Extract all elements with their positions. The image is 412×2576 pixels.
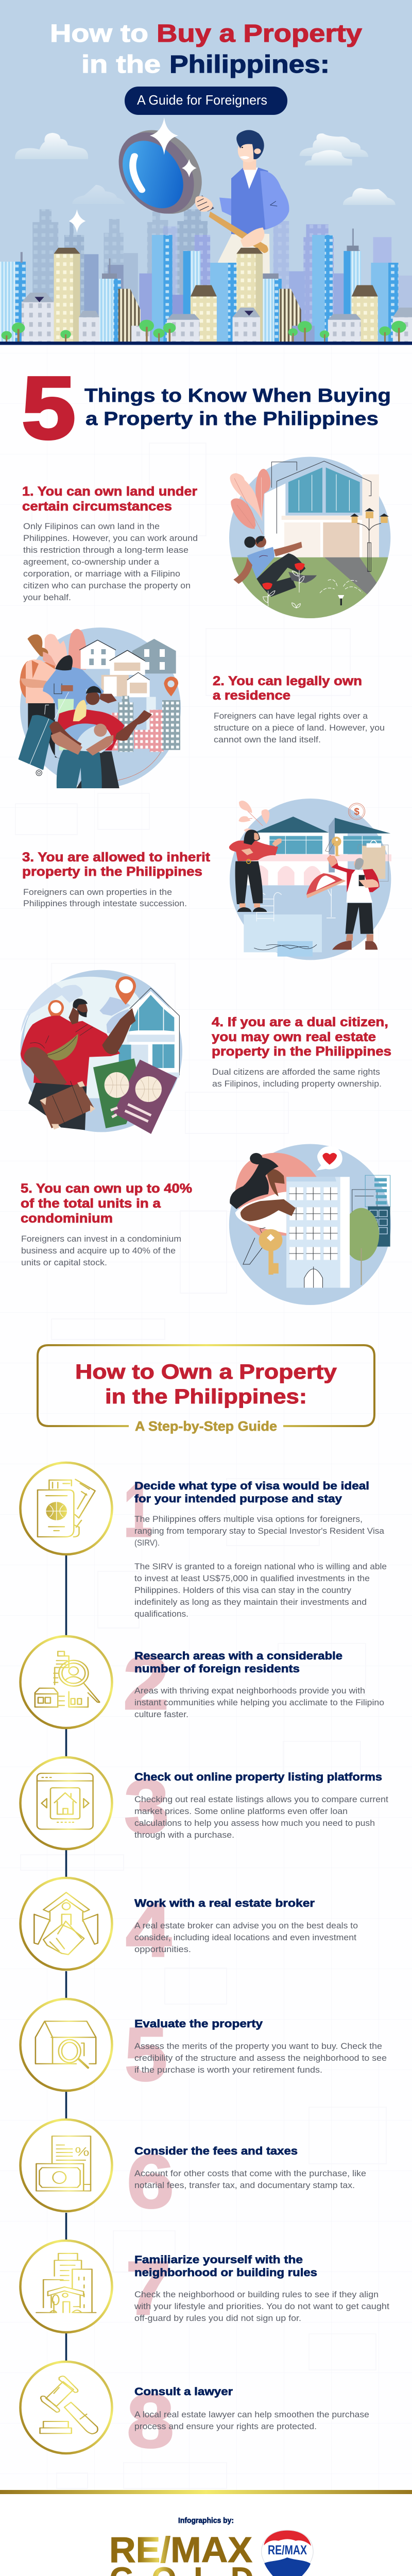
illustration: woman hugging condominium xyxy=(229,1144,391,1305)
text 1: your behalf. xyxy=(23,592,71,602)
step 8 title: Consult a lawyer xyxy=(134,2385,233,2398)
step 4 text: A real estate broker can advise you on the best deals to xyxy=(134,1921,358,1930)
panel: thing 5 xyxy=(21,1144,391,1305)
text 1: Philippines. However, you can work around xyxy=(23,533,198,543)
step 1 title: Decide what type of visa would be ideal xyxy=(134,1480,369,1492)
heading 1: 1. You can own land under xyxy=(22,484,197,499)
step 3 title: Check out online property listing platforms xyxy=(134,1771,382,1783)
number 3: 3 xyxy=(124,1765,169,1849)
step 2 xyxy=(21,1636,384,1728)
gold frame xyxy=(38,1345,374,1426)
step 3 xyxy=(21,1757,388,1849)
step 7 xyxy=(21,2241,389,2332)
step 1 text: (SIRV). xyxy=(134,1538,160,1548)
heading 2: 2. You can legally own xyxy=(213,674,362,688)
RE/MAX GOLD wordmark: RE/MAX xyxy=(109,2530,252,2570)
number 6: 6 xyxy=(127,2140,174,2224)
step 7 text: Check the neighborhood or building rules to see if they align xyxy=(134,2290,379,2299)
icon circle 5 xyxy=(21,1999,112,2091)
step 1 text: qualifications. xyxy=(134,1609,188,1619)
step 3 text: through with a purchase. xyxy=(134,1830,234,1840)
panel: thing 1 xyxy=(22,457,402,626)
step 3 text: market prices. Some online platforms even offer loan xyxy=(134,1806,348,1816)
illustration: man with passports xyxy=(20,970,182,1134)
far buildings xyxy=(32,209,412,342)
illustration: family with luggage and houses xyxy=(19,628,181,788)
text 2: cannot own the land itself. xyxy=(214,735,321,744)
step 7 title: neighborhood or building rules xyxy=(134,2266,317,2279)
step 2 text: instant communities while helping you acclimate to the Filipino xyxy=(134,1698,384,1707)
text 5: business and acquire up to 40% of the xyxy=(21,1246,176,1256)
clouds xyxy=(15,133,396,205)
icon circle 1 xyxy=(21,1463,112,1554)
step 7 title xyxy=(134,2253,317,2279)
illustration: pool house and couple: $ xyxy=(354,806,359,817)
heading 5: 5. You can own up to 40% xyxy=(21,1181,192,1196)
number 8: 8 xyxy=(127,2379,174,2464)
text 1: agreement, co-ownership under a xyxy=(23,557,160,567)
step 5 text: Assess the merits of the property you want to buy. Check the xyxy=(134,2041,382,2051)
heading 3: property in the Philippines xyxy=(22,865,202,879)
front towers xyxy=(0,229,398,342)
number 4: 4 xyxy=(126,1888,171,1973)
icon circle 3 xyxy=(21,1757,112,1849)
step 2 title: Research areas with a considerable xyxy=(134,1650,342,1662)
panel: thing 4 xyxy=(20,970,391,1134)
heading 3: 3. You are allowed to inherit xyxy=(22,850,211,865)
step 7 text xyxy=(134,2290,389,2323)
steps title: How to Own a Property xyxy=(75,1361,337,1383)
hero title xyxy=(50,20,362,78)
heading text: a Property in the Philippines xyxy=(85,408,379,429)
step 1 text: The Philippines offers multiple visa options for foreigners, xyxy=(134,1514,363,1524)
step 8 xyxy=(21,2362,369,2464)
infographics by: Infographics by: xyxy=(178,2516,234,2525)
text 1: Only Filipinos can own land in the xyxy=(23,521,160,531)
low houses xyxy=(22,293,412,342)
heading 2 xyxy=(213,674,362,703)
lower hand xyxy=(241,228,264,247)
steps subtitle: A Step-by-Step Guide xyxy=(135,1418,277,1434)
step 8 text: A local real estate lawyer can help smoothen the purchase xyxy=(134,2410,369,2419)
footer background xyxy=(0,2494,412,2576)
number 5: 5 xyxy=(125,2012,167,2097)
step 5 text: if the purchase is worth your retirement funds. xyxy=(134,2065,322,2075)
steps title xyxy=(75,1361,337,1408)
icon: fee document and cash: % xyxy=(75,2145,90,2159)
step 1 text: The SIRV is granted to a foreign national who is willing and able xyxy=(134,1562,387,1571)
step 2 text: Areas with thriving expat neighborhoods provide you with xyxy=(134,1686,365,1696)
step 3 text: calculations to help you assess how much you need to push xyxy=(134,1818,375,1828)
heading text: Things to Know When Buying xyxy=(84,385,391,406)
step 5 text xyxy=(134,2041,387,2075)
icon circle 8 xyxy=(21,2362,112,2453)
icon circle 2 xyxy=(21,1636,112,1728)
panel: steps heading box xyxy=(38,1345,374,1434)
step 7 title: Familiarize yourself with the xyxy=(134,2253,303,2266)
heading 4: you may own real estate xyxy=(212,1030,376,1044)
step 1 text: ranging from temporary stay to Special Investor's Resident Visa xyxy=(134,1526,385,1536)
RE/MAX balloon logo xyxy=(262,2530,313,2576)
step 7 text: off-guard by rules you did not sign up for. xyxy=(134,2313,301,2323)
step 5 xyxy=(21,1999,387,2097)
icon: house with magnifier xyxy=(36,2021,96,2067)
step 1 xyxy=(21,1463,387,1619)
number 1: 1 xyxy=(124,1468,152,1553)
step 3 text: Checking out real estate listings allows you to compare current xyxy=(134,1794,388,1804)
heading 5 xyxy=(21,1181,192,1226)
step 4 xyxy=(21,1878,358,1973)
steps title: in the Philippines: xyxy=(105,1385,307,1408)
step 8 text xyxy=(134,2410,369,2431)
text 4 xyxy=(212,1067,382,1089)
text 2: Foreigners can have legal rights over a xyxy=(214,711,368,721)
panel: footer xyxy=(0,2490,412,2576)
step 1 title xyxy=(134,1480,369,1505)
text 4: Dual citizens are afforded the same rights xyxy=(212,1067,380,1077)
section heading: 5 things xyxy=(22,359,391,457)
heading 4: property in the Philippines xyxy=(212,1044,391,1059)
panel: thing 2 xyxy=(19,628,385,788)
man's legs xyxy=(218,234,270,279)
heading 5: of the total units in a xyxy=(21,1196,161,1211)
icon: fee document and cash xyxy=(36,2136,91,2191)
beige towers xyxy=(54,248,378,342)
icon: buildings and magnifier xyxy=(35,1651,99,1707)
big number 5: 5 xyxy=(22,359,76,457)
text 1: corporation, or marriage with a Filipino xyxy=(23,569,180,579)
man's body xyxy=(219,167,289,236)
heading 5: condominium xyxy=(21,1211,113,1226)
step 6 text: Account for other costs that come with the purchase, like xyxy=(134,2168,366,2178)
text 4: as Filipinos, including property ownership. xyxy=(212,1079,382,1089)
text 5: units or capital stock. xyxy=(21,1258,107,1267)
number 7: 7 xyxy=(126,2246,171,2331)
step 2 title xyxy=(134,1650,342,1675)
text 3 xyxy=(23,887,187,908)
step 4 text: opportunities. xyxy=(134,1944,191,1954)
icon circle 4 xyxy=(21,1878,112,1970)
step 5 text: credibility of the structure and assess the neighborhood to see xyxy=(134,2053,387,2063)
gold divider xyxy=(0,2490,412,2494)
text 1: this restriction through a long-term lease xyxy=(23,545,188,555)
step 5 title: Evaluate the property xyxy=(134,2018,263,2030)
subtitle pill: A Guide for Foreigners xyxy=(137,92,267,108)
subtitle pill xyxy=(125,87,287,115)
timeline connector xyxy=(65,1555,67,2361)
hero navy bar xyxy=(0,342,412,345)
step 4 text: consider, including ideal locations and even investment xyxy=(134,1933,356,1942)
heading 3 xyxy=(22,850,211,879)
text 3: Philippines through intestate succession. xyxy=(23,899,187,908)
step 6 xyxy=(21,2120,366,2224)
text 2 xyxy=(214,711,385,744)
number 2: 2 xyxy=(123,1641,169,1725)
hero title: How to xyxy=(50,20,148,47)
step 2 text: culture faster. xyxy=(134,1709,188,1719)
step 6 title: Consider the fees and taxes xyxy=(134,2145,298,2157)
step 7 text: with your lifestyle and priorities. You do not want to get caught xyxy=(134,2301,389,2311)
RE/MAX balloon logo: RE/MAX xyxy=(268,2543,307,2557)
hero sky background xyxy=(0,0,412,342)
step 6 text: notarial fees, transfer tax, and documentary stamp tax. xyxy=(134,2180,355,2190)
panel: thing 3 xyxy=(22,799,391,960)
text 5 xyxy=(21,1234,181,1267)
step 2 text xyxy=(134,1686,384,1719)
icon circle 7 xyxy=(21,2241,112,2332)
heading 1: certain circumstances xyxy=(22,499,172,514)
step 1 text: Philippines. Holders of this visa can stay in the country xyxy=(134,1585,352,1595)
step 6 text xyxy=(134,2168,366,2190)
illustration: pool house and couple xyxy=(229,799,391,960)
illustration: woman sitting on lawn before house xyxy=(229,456,390,618)
icon circle 6 xyxy=(21,2120,112,2211)
icon: gavel xyxy=(40,2376,98,2434)
text 2: structure on a piece of land. However, you xyxy=(214,723,385,733)
heading 4 xyxy=(212,1015,391,1059)
step 3 text xyxy=(134,1794,388,1840)
sparkles xyxy=(69,117,197,233)
icon: house and handshake xyxy=(34,1892,98,1955)
step 1 title: for your intended purpose and stay xyxy=(134,1493,342,1505)
heading 2: a residence xyxy=(213,688,290,703)
step 1 text xyxy=(134,1514,387,1619)
icon: passport and tickets xyxy=(38,1479,95,1537)
text 3: Foreigners can own properties in the xyxy=(23,887,172,897)
heading text xyxy=(84,385,391,429)
panel: hero header xyxy=(0,0,412,342)
text 5: Foreigners can invest in a condominium xyxy=(21,1234,181,1244)
heading 1 xyxy=(22,484,197,514)
step 4 text xyxy=(134,1921,358,1954)
trees xyxy=(2,320,406,342)
text 1 xyxy=(23,521,198,602)
step 2 title: number of foreign residents xyxy=(134,1663,300,1675)
step 1 text: to invest at least US$75,000 in qualified investments in the xyxy=(134,1573,370,1583)
hero title: Philippines: xyxy=(169,51,330,78)
hero title: Buy a Property xyxy=(157,20,362,47)
heading 4: 4. If you are a dual citizen, xyxy=(212,1015,388,1029)
hero title: in the xyxy=(81,51,161,78)
icon: neighborhood buildings xyxy=(36,2253,96,2313)
step 8 text: process and ensure your rights are protected. xyxy=(134,2421,317,2431)
icon: online listing xyxy=(37,1773,93,1829)
hero illustration: skyline and man with magnifier xyxy=(0,117,412,342)
step 4 title: Work with a real estate broker xyxy=(134,1897,315,1909)
text 1: citizen who can purchase the property on xyxy=(23,581,191,590)
magnifier xyxy=(105,121,268,253)
man's head xyxy=(236,130,264,170)
step 1 text: indefinitely as long as they maintain their investments and xyxy=(134,1597,367,1607)
